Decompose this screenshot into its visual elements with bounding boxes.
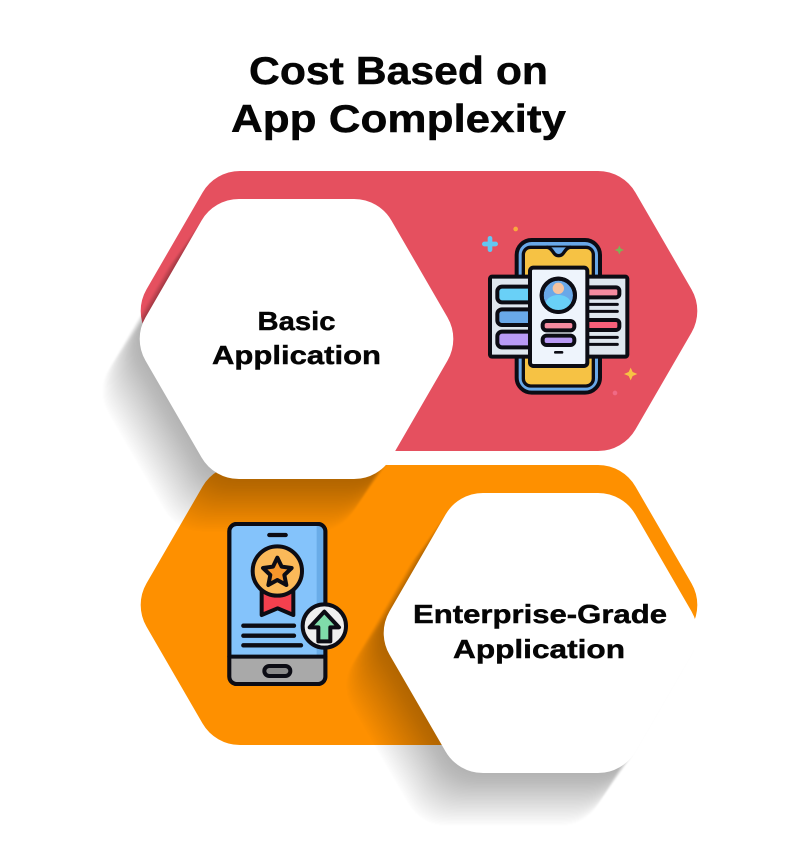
label: enterprise-grade application: Enterprise-Grade (413, 599, 667, 629)
title (231, 50, 566, 141)
label: enterprise-grade application (413, 599, 667, 664)
label: basic application: Basic (258, 306, 336, 336)
label: basic application: Application (212, 340, 381, 370)
title: App Complexity (231, 98, 566, 141)
panel: enterprise-grade white hexagon (384, 493, 697, 773)
label: basic application (212, 306, 381, 370)
icon: phone with award medal and upgrade arrow (229, 524, 346, 684)
panel: enterprise-grade application background hexagon (141, 465, 697, 745)
label: enterprise-grade application: Application (453, 634, 625, 664)
title: Cost Based on (249, 50, 548, 93)
panel: basic application white hexagon (140, 199, 453, 479)
icon: phone with profile cards (484, 227, 637, 395)
long shadow of enterprise hexagon (347, 495, 696, 825)
panel: basic application background hexagon (141, 171, 697, 451)
long shadow of basic hexagon (103, 201, 452, 531)
